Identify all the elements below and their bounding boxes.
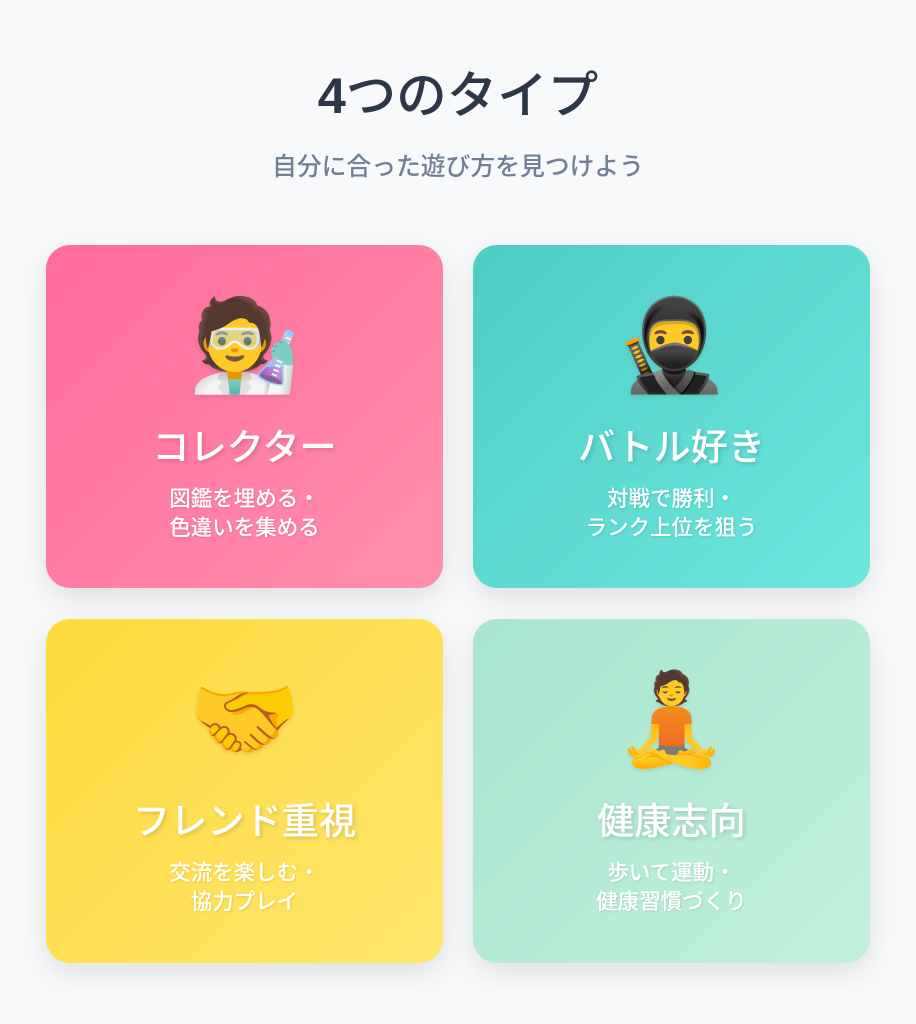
text: battle description bbox=[585, 486, 758, 540]
icon: meditation: 🧘 bbox=[615, 667, 728, 772]
text: friend description: 協力プレイ bbox=[191, 890, 298, 914]
icon: ninja: 🥷 bbox=[615, 293, 728, 398]
panel: friend bbox=[46, 619, 443, 962]
text: collector description: 図鑑を埋める・ bbox=[169, 486, 320, 510]
panel: battle bbox=[473, 245, 870, 588]
text: health description: 歩いて運動・ bbox=[607, 860, 736, 884]
panel: collector bbox=[46, 245, 443, 588]
subtitle: 自分に合った遊び方を見つけよう bbox=[272, 154, 644, 181]
icon: scientist: 🧑‍🔬 bbox=[188, 293, 301, 398]
text: friend description: 交流を楽しむ・ bbox=[169, 860, 320, 884]
panel: health bbox=[473, 619, 870, 962]
text: health description: 健康習慣づくり bbox=[596, 890, 747, 914]
heading: friend: フレンド重視 bbox=[133, 800, 356, 842]
text: battle description: 対戦で勝利・ bbox=[607, 486, 736, 510]
text: battle description: ランク上位を狙う bbox=[585, 516, 758, 540]
text: friend description bbox=[169, 860, 320, 914]
icon: handshake: 🤝 bbox=[188, 667, 301, 772]
heading: health: 健康志向 bbox=[597, 800, 746, 842]
title: 4つのタイプ bbox=[318, 67, 598, 124]
text: health description bbox=[596, 860, 747, 914]
heading: collector: コレクター bbox=[152, 426, 337, 468]
text: collector description: 色違いを集める bbox=[169, 516, 320, 540]
text: collector description bbox=[169, 486, 320, 540]
heading: battle: バトル好き bbox=[578, 426, 765, 468]
